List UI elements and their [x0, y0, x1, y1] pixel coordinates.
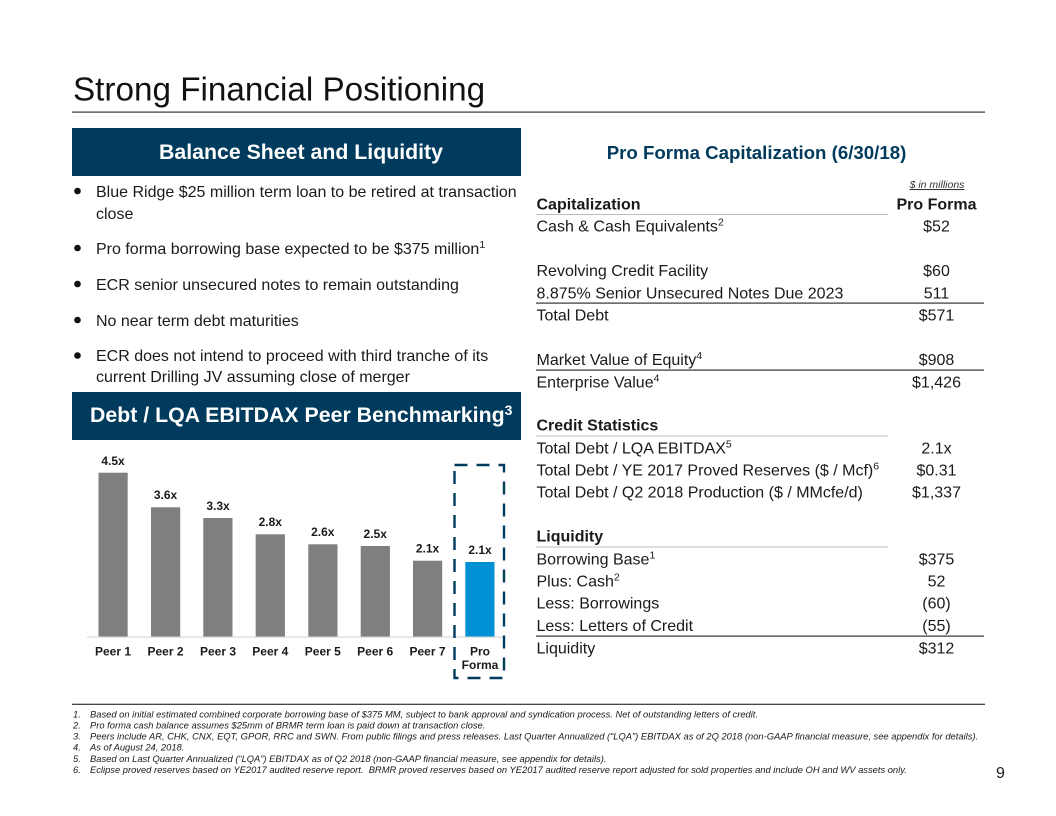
table: capitalization: $52: [923, 219, 950, 236]
table: capitalization: $908: [919, 352, 954, 369]
table: capitalization: Cash & Cash Equivalents: [536, 219, 718, 236]
table: capitalization: Pro Forma: [896, 196, 977, 213]
table: liquidity: Liquidity: [536, 529, 603, 546]
table: capitalization: Enterprise Value: [536, 374, 654, 391]
footnotes: As of August 24, 2018.: [89, 743, 184, 753]
panel: balance sheet heading: [72, 128, 521, 176]
bar chart: debt / LQA EBITDAX by peer: [87, 454, 504, 678]
callout: dashed box around Pro Forma: [454, 465, 504, 678]
text block: balance sheet bullets: close: [96, 206, 133, 223]
footnotes: [72, 710, 978, 775]
table: capitalization: Capitalization: [536, 196, 641, 213]
table: liquidity: 52: [928, 574, 946, 591]
bar: Peer 2: 3.6x: [154, 488, 178, 502]
bar: Pro Forma: 2.1x: [468, 543, 492, 557]
footnotes: 2.: [72, 720, 81, 730]
footnotes: 1.: [73, 710, 81, 720]
table: credit statistics: [536, 418, 961, 502]
bar: Peer 7: [409, 542, 446, 658]
bar: Peer 6: Peer 6: [357, 644, 394, 658]
table: liquidity: $375: [919, 551, 954, 568]
table: capitalization: 511: [924, 285, 949, 302]
table: credit statistics: Total Debt / LQA EBITDAX: [536, 440, 726, 457]
table: credit statistics: Total Debt / YE 2017 Proved Reserves ($ / Mcf): [536, 463, 873, 480]
bar: Peer 7: Peer 7: [409, 644, 446, 658]
text block: balance sheet bullets: ECR does not intend to proceed with third tranche of its: [96, 348, 488, 365]
table: liquidity: (60): [922, 596, 951, 613]
bar: Peer 4: [252, 515, 289, 658]
text block: balance sheet bullets: ECR senior unsecured notes to remain outstanding: [96, 277, 459, 294]
footnotes: 5.: [73, 754, 81, 764]
table: liquidity: Borrowing Base: [536, 551, 649, 568]
table: liquidity: Plus: Cash: [536, 574, 614, 591]
table: capitalization: Total Debt: [536, 308, 609, 325]
footnotes: 3.: [73, 732, 81, 742]
bar: Peer 3: 3.3x: [206, 499, 230, 513]
bar: Peer 1: [95, 454, 131, 658]
table: liquidity: Less: Borrowings: [536, 596, 659, 613]
table: capitalization: [536, 179, 984, 391]
table: credit statistics: 6: [873, 461, 879, 473]
table: liquidity: $312: [919, 640, 954, 657]
table: capitalization: 8.875% Senior Unsecured Notes Due 2023: [536, 285, 843, 302]
footnotes: Eclipse proved reserves based on YE2017 audited reserve report. BRMR proved reserves based on YE2017 audited reserve report adjusted for sold properties and include OH and WV assets only.: [90, 765, 907, 775]
table: liquidity: Less: Letters of Credit: [536, 618, 694, 635]
table: capitalization: Market Value of Equity: [536, 352, 696, 369]
footnotes: Based on initial estimated combined corporate borrowing base of $375 MM, subject to bank approval and syndication process. Net of outstanding letters of credit.: [90, 710, 758, 720]
page number: 9: [996, 765, 1005, 782]
table: capitalization: 4: [654, 372, 660, 384]
table: credit statistics: 2.1x: [921, 440, 952, 457]
footnotes: 6.: [73, 765, 81, 775]
table: capitalization: $60: [923, 263, 950, 280]
bar: Pro Forma: [462, 543, 499, 672]
text block: balance sheet bullets: Pro forma borrowing base expected to be $375 million: [96, 241, 479, 258]
title: Strong Financial Positioning: [73, 72, 485, 108]
table: credit statistics: $0.31: [916, 463, 957, 480]
bar: Pro Forma: Forma: [462, 658, 499, 672]
text block: balance sheet bullets: Blue Ridge $25 million term loan to be retired at transaction: [96, 184, 517, 201]
panel: peer benchmarking heading: 3: [505, 402, 513, 418]
table: capitalization: $ in millions: [909, 179, 965, 191]
bar: Peer 1: 4.5x: [101, 454, 125, 468]
footnotes: 4.: [73, 743, 81, 753]
table: liquidity: 1: [649, 549, 655, 561]
panel: balance sheet heading: Balance Sheet and Liquidity: [159, 140, 443, 164]
table: capitalization: $571: [919, 308, 954, 325]
panel: peer benchmarking heading: Debt / LQA EBITDAX Peer Benchmarking: [90, 403, 505, 427]
table: capitalization: Revolving Credit Facility: [536, 263, 708, 280]
text block: balance sheet bullets: 1: [479, 239, 485, 251]
footnotes: Based on Last Quarter Annualized (“LQA”) EBITDAX as of Q2 2018 (non-GAAP financial measure, see appendix for details).: [90, 754, 606, 764]
text block: balance sheet bullets: [74, 184, 517, 386]
panel: peer benchmarking heading: [72, 392, 521, 440]
table: credit statistics: Credit Statistics: [536, 418, 658, 435]
table: liquidity: (55): [922, 618, 951, 635]
bar: Peer 6: [357, 527, 394, 658]
table: credit statistics: 5: [726, 438, 732, 450]
bar: Peer 2: [147, 488, 184, 658]
table: credit statistics: Total Debt / Q2 2018 Production ($ / MMcfe/d): [536, 485, 863, 502]
bar: Peer 2: Peer 2: [147, 644, 184, 658]
table: credit statistics: $1,337: [912, 485, 961, 502]
text block: balance sheet bullets: No near term debt maturities: [96, 313, 299, 330]
footnotes: Peers include AR, CHK, CNX, EQT, GPOR, RRC and SWN. From public filings and press releases. Last Quarter Annualized (“LQA”) EBITDAX as of 2Q 2018 (non-GAAP financial measure, see appendix for details).: [90, 732, 978, 742]
bar: Peer 3: [200, 499, 236, 658]
bar: Peer 1: Peer 1: [95, 644, 131, 658]
table: capitalization: 4: [696, 350, 702, 362]
text block: balance sheet bullets: current Drilling JV assuming close of merger: [96, 369, 411, 386]
table: liquidity: [536, 529, 984, 657]
bar: Peer 4: 2.8x: [259, 515, 282, 529]
table: capitalization: $1,426: [912, 374, 961, 391]
table: liquidity: Liquidity: [536, 640, 595, 657]
bar: Peer 7: 2.1x: [416, 542, 440, 556]
bar: Peer 5: [305, 525, 341, 658]
bar: Peer 4: Peer 4: [252, 644, 289, 658]
heading: pro forma capitalization: Pro Forma Capitalization (6/30/18): [607, 142, 906, 163]
bar: Peer 5: Peer 5: [305, 644, 341, 658]
bar: Pro Forma: Pro: [470, 644, 490, 658]
bar: Peer 6: 2.5x: [364, 527, 387, 541]
bar: Peer 3: Peer 3: [200, 644, 236, 658]
table: liquidity: 2: [614, 572, 620, 584]
bar: Peer 5: 2.6x: [311, 525, 335, 539]
footnotes: Pro forma cash balance assumes $25mm of BRMR term loan is paid down at transaction close.: [90, 720, 485, 730]
table: capitalization: 2: [718, 217, 724, 229]
